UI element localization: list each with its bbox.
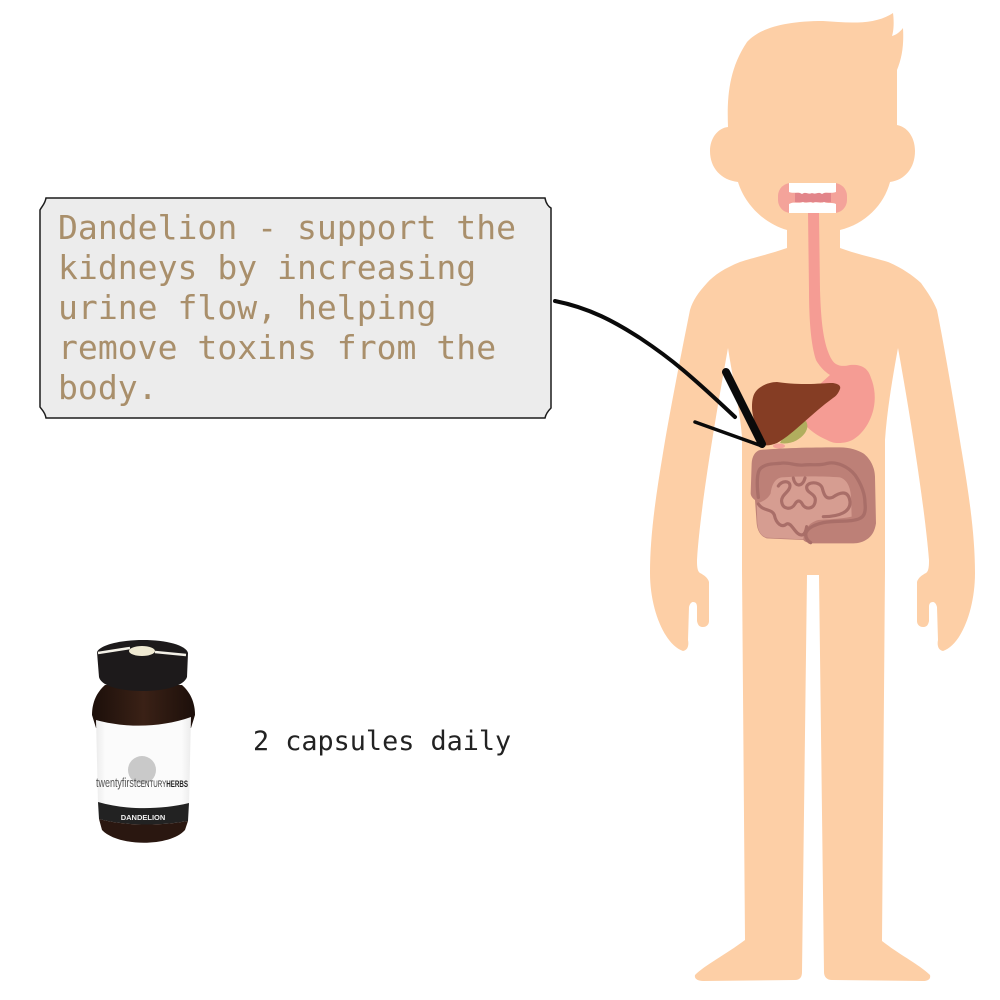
small pink duct xyxy=(773,444,785,448)
esophagus and stomach xyxy=(800,213,875,443)
lighter lower intestine xyxy=(757,476,852,539)
liver xyxy=(752,382,840,445)
callout text: remove toxins from the xyxy=(58,328,496,367)
large intestine outline xyxy=(757,463,865,543)
arrow: callout to liver xyxy=(555,301,762,446)
supplement bottle xyxy=(92,640,195,843)
mouth xyxy=(778,183,847,213)
callout box xyxy=(40,198,551,418)
bottle body xyxy=(92,685,195,728)
head and hair xyxy=(710,13,915,230)
label brand: twentyfirstCENTURYHERBS xyxy=(96,775,188,790)
dosage text: 2 capsules daily xyxy=(253,726,511,757)
supplement bottle: DANDELION xyxy=(121,813,165,822)
callout text: body. xyxy=(58,368,158,407)
callout text: kidneys by increasing xyxy=(58,248,476,287)
body silhouette xyxy=(650,220,975,981)
label band xyxy=(98,802,189,825)
gallbladder xyxy=(780,421,807,443)
bottle base xyxy=(99,819,188,843)
body figure xyxy=(650,13,975,981)
label logo xyxy=(128,756,156,784)
callout text: urine flow, helping xyxy=(58,288,436,327)
small intestine coils xyxy=(758,478,850,535)
bottle label xyxy=(96,717,191,810)
intestines xyxy=(751,447,876,543)
callout text: Dandelion - support the xyxy=(58,208,516,247)
bottle cap xyxy=(97,640,188,691)
cap seal xyxy=(98,648,186,655)
